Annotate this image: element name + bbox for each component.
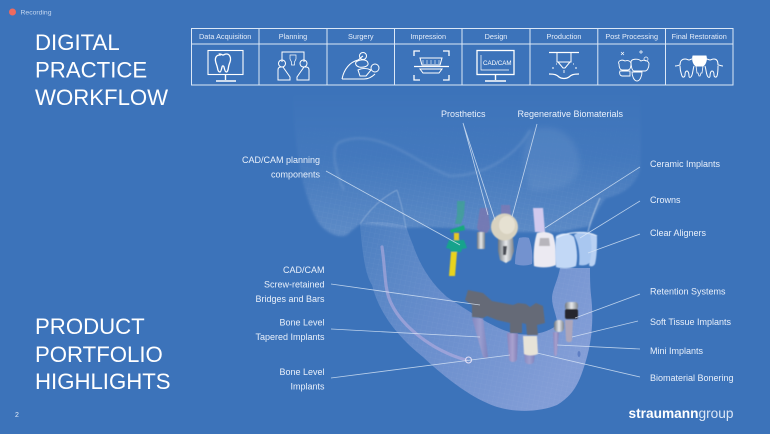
labels: right column: Clear Aligners [650, 228, 707, 238]
labels: left column: CAD/CAM [283, 265, 324, 275]
page number: 2 [15, 412, 19, 419]
icon: post processing [619, 50, 649, 81]
jaw and skull illustration [299, 126, 640, 411]
green planning component [446, 201, 467, 276]
mini implant head [554, 320, 564, 332]
workflow table [192, 28, 733, 85]
labels: left column: Bridges and Bars [255, 294, 325, 304]
workflow step labels: Planning [279, 32, 307, 41]
labels: left column: Screw-retained [264, 280, 324, 290]
labels: right column: Crowns [650, 195, 681, 205]
labels: right column: Mini Implants [650, 346, 704, 356]
labels: left column: Bone Level [279, 318, 324, 328]
labels: top: Regenerative Biomaterials [518, 109, 624, 119]
recording badge [9, 8, 52, 16]
table grid [192, 28, 733, 85]
recording badge: Recording [20, 10, 52, 16]
workflow step labels: Design [485, 32, 507, 41]
workflow step labels: Production [547, 32, 581, 41]
labels: right column: Ceramic Implants [650, 159, 721, 169]
labels: left column [242, 155, 325, 392]
icon: production [549, 52, 579, 78]
ceramic implant and crown [533, 208, 556, 267]
regenerative biomaterial and metal abutment [491, 205, 518, 263]
workflow step labels: Data Acquisition [199, 32, 251, 41]
labels: right column: Soft Tissue Implants [650, 317, 732, 327]
translucent tooth [515, 237, 532, 266]
labels: left column: Implants [290, 382, 325, 392]
labels: top: Prosthetics [441, 109, 486, 119]
icon: design [477, 50, 514, 81]
mandible [360, 222, 592, 411]
labels: left column: Bone Level [279, 367, 324, 377]
labels: left column: CAD/CAM planning [242, 155, 320, 165]
icon: design: CAD/CAM [483, 60, 512, 67]
leader lines [326, 123, 640, 378]
screw-retained bar [465, 290, 545, 335]
logo: straumann group: straumanngroup [628, 405, 734, 421]
title: product portfolio highlights: HIGHLIGHTS [35, 369, 171, 394]
retention system head [565, 302, 578, 319]
icon: final restoration [675, 56, 723, 77]
workflow step labels [199, 32, 727, 41]
labels: right column: Retention Systems [650, 286, 726, 296]
biomaterial bone ring [523, 336, 538, 356]
labels: left column: Tapered Implants [255, 332, 325, 342]
icon: impression [414, 51, 449, 80]
icon: planning [278, 52, 309, 80]
workflow step labels: Surgery [348, 32, 374, 41]
labels: right column [650, 159, 734, 383]
icon: data acquisition [208, 50, 243, 81]
upper implant and abutment [477, 208, 490, 249]
lower implants [472, 318, 573, 364]
labels: right column: Biomaterial Bonering [650, 373, 734, 383]
title: digital practice workflow: PRACTICE [35, 58, 147, 82]
workflow step labels: Post Processing [605, 32, 658, 41]
labels: left column: components [271, 170, 320, 180]
icon: surgery [342, 52, 379, 79]
title: digital practice workflow: WORKFLOW [35, 85, 168, 110]
skull: cranium [299, 126, 640, 237]
title: digital practice workflow: DIGITAL [35, 30, 119, 55]
workflow step labels: Impression [410, 32, 446, 41]
title: product portfolio highlights: PORTFOLIO [35, 342, 163, 367]
labels: top [441, 109, 624, 119]
clear aligner teeth [555, 232, 597, 268]
title: product portfolio highlights: PRODUCT [35, 314, 145, 339]
workflow step labels: Final Restoration [672, 32, 727, 41]
